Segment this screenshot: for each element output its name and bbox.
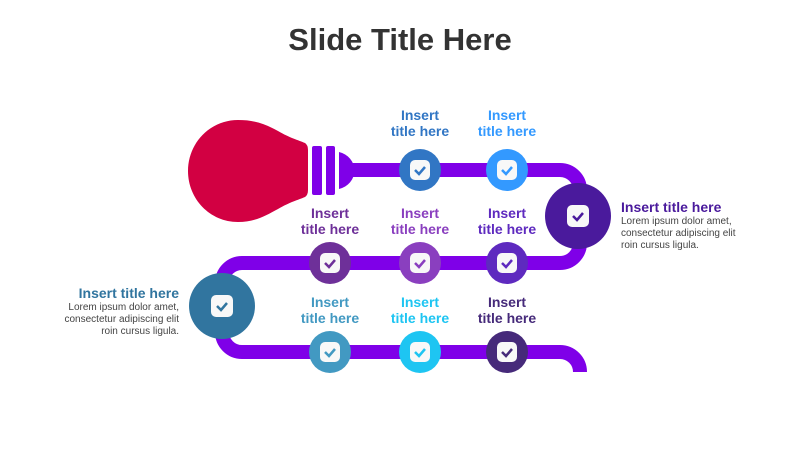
side text right: Insert title here: [621, 199, 721, 215]
side text right: roin cursus ligula.: [621, 240, 699, 251]
text: Insert: [488, 107, 526, 123]
side text left: [64, 285, 179, 337]
side text right: consectetur adipiscing elit: [621, 228, 736, 239]
labels: [391, 107, 449, 139]
text: title here: [478, 221, 536, 237]
text: Insert: [401, 205, 439, 221]
text: Insert: [401, 294, 439, 310]
labels: Insert: [401, 107, 439, 123]
side text left: Lorem ipsum dolor amet,: [68, 302, 179, 313]
text: title here: [301, 310, 359, 326]
text: Insert: [488, 205, 526, 221]
text: title here: [478, 123, 536, 139]
path: [222, 170, 580, 372]
text: title here: [301, 221, 359, 237]
labels: title here: [391, 123, 449, 139]
side text left: roin cursus ligula.: [101, 326, 179, 337]
side text right: [621, 199, 736, 251]
icon: light bulb: [188, 120, 354, 222]
side text left: Insert title here: [79, 285, 179, 301]
text: Insert: [311, 205, 349, 221]
side text left: consectetur adipiscing elit: [64, 314, 179, 325]
title: Slide Title Here: [288, 22, 512, 57]
nodes: [189, 149, 611, 373]
text: Insert: [488, 294, 526, 310]
side text right: Lorem ipsum dolor amet,: [621, 216, 732, 227]
text: title here: [391, 310, 449, 326]
text: title here: [391, 221, 449, 237]
text: title here: [478, 310, 536, 326]
text: Insert: [311, 294, 349, 310]
